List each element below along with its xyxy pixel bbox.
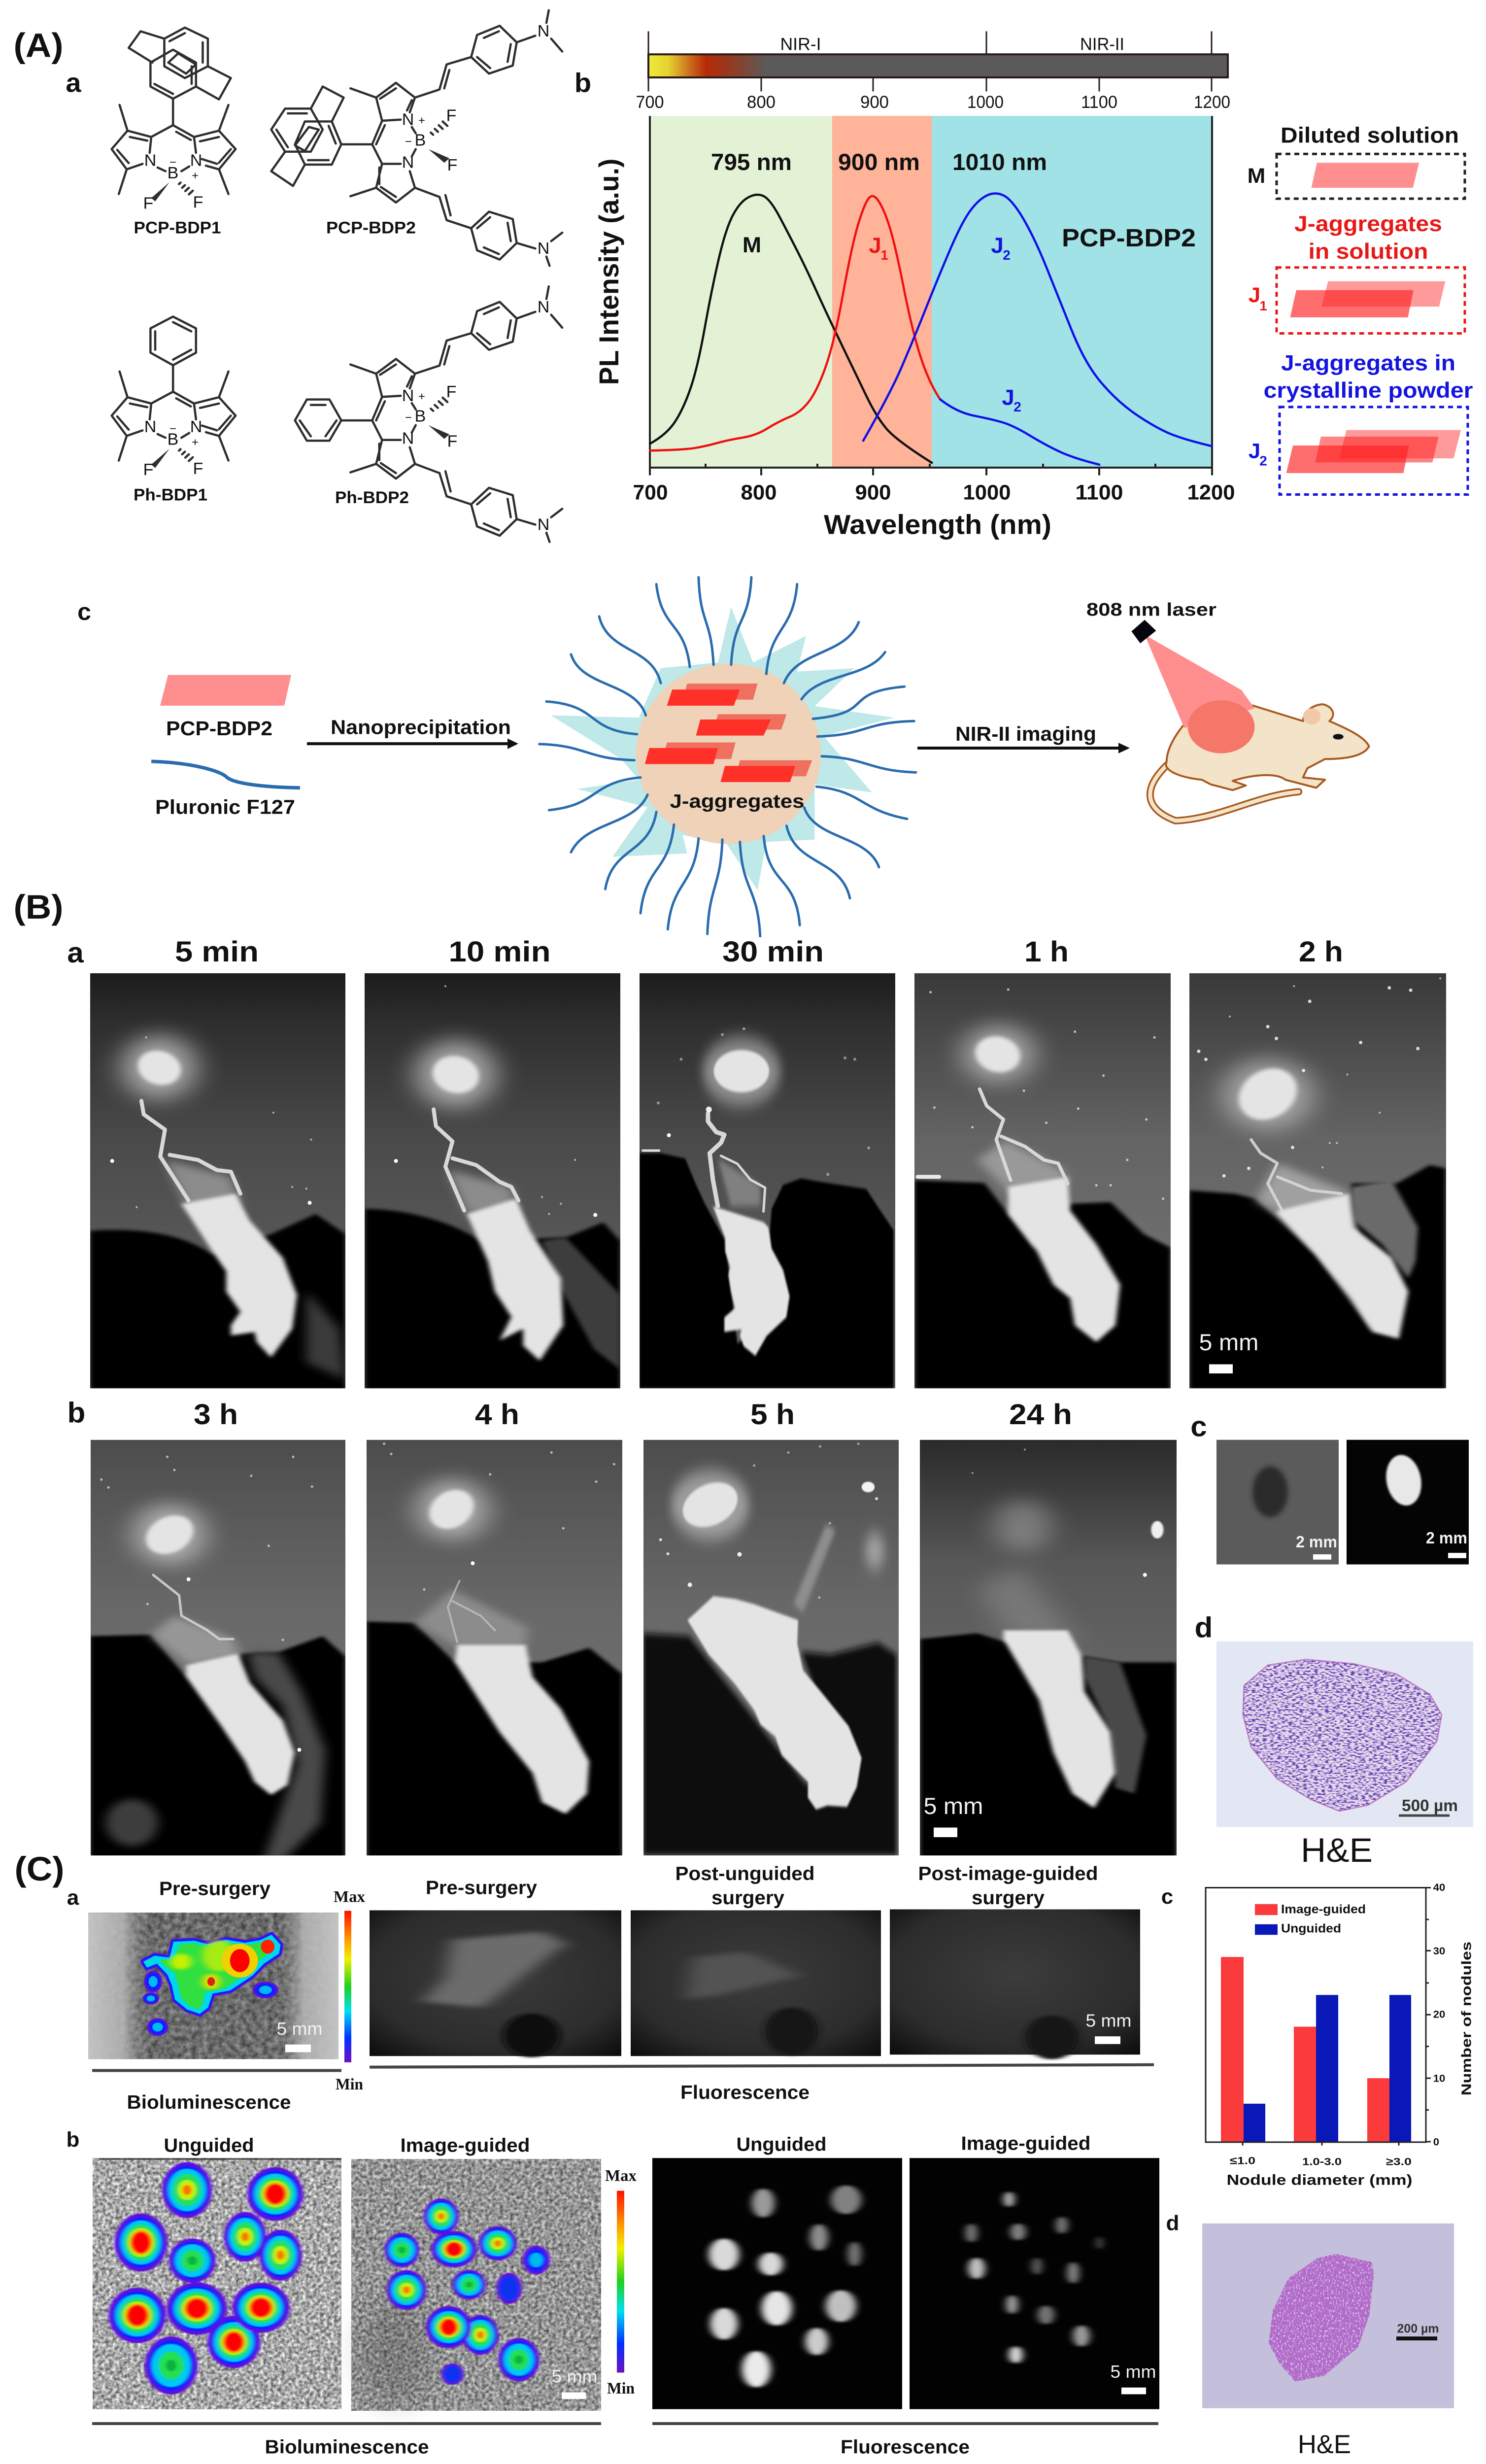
NIR wavelength bar: 900: [860, 92, 889, 112]
image: 5 h: [643, 1440, 899, 1855]
image: 2 h: 5 mm: [1199, 1330, 1258, 1356]
time labels row a: [175, 935, 1343, 968]
nodule photo: fluorescence: [1347, 1440, 1469, 1565]
bioluminescence image: image-guided nodules: [351, 2159, 601, 2411]
PL spectrum chart: 900: [855, 481, 891, 504]
nodule photo: bright field: 2 mm: [1296, 1533, 1337, 1551]
column headings C-a: surgery: [711, 1887, 784, 1909]
panel label: (B): (B): [13, 888, 63, 926]
column headings C-b: Image-guided: [961, 2133, 1091, 2155]
PL spectrum chart: 900 nm: [838, 150, 920, 175]
aggregate legend: 2: [1259, 453, 1267, 468]
bar chart: nodule counts: 20: [1433, 2008, 1445, 2020]
panel label: (C): (C): [14, 1850, 64, 1888]
PCP-BDP2 parallelogram: [160, 675, 291, 706]
PL spectrum chart: 795 nm: [711, 150, 792, 175]
PL spectrum chart: 800: [741, 481, 777, 504]
fluorescence image: image-guided nodules: [910, 2158, 1159, 2409]
PL spectrum chart: J: [869, 233, 881, 258]
fluorescence image: unguided nodules: [652, 2158, 902, 2409]
panel label: A-b: b: [574, 68, 591, 98]
PL spectrum chart: 1200: [1187, 481, 1235, 504]
molecule: PCP-BDP2: F: [447, 157, 457, 174]
bar chart: nodule counts: Image-guided: [1281, 1903, 1366, 1916]
image: 10 min: [365, 973, 620, 1389]
bar chart: nodule counts: 1.0-3.0: [1302, 2156, 1342, 2167]
panel label: C-c: c: [1161, 1885, 1173, 1909]
molecule: PCP-BDP2: [271, 10, 562, 266]
Pluronic F127 label: Pluronic F127: [155, 795, 295, 818]
molecule: PCP-BDP1: PCP-BDP1: [134, 219, 221, 237]
column headings C-b: Image-guided: [401, 2135, 530, 2156]
nodule photo: bright field: [1216, 1440, 1339, 1565]
NIR wavelength bar: 1100: [1081, 92, 1117, 112]
bar chart: nodule counts: ≥3.0: [1386, 2156, 1412, 2167]
time labels row a: 1 h: [1024, 935, 1069, 968]
panel label: C-a: a: [67, 1886, 79, 1910]
panel label: (A): (A): [13, 26, 63, 64]
PL spectrum chart: [633, 116, 1235, 540]
colorbar C-a: [334, 1888, 365, 2093]
H&E section image (C): 200 µm: [1397, 2322, 1439, 2336]
colorbar C-b: Max: [605, 2167, 637, 2185]
PL spectrum chart: 2: [1013, 400, 1021, 414]
molecule: Ph-BDP2: [295, 286, 562, 542]
fluorescence image: image-guided nodules: 5 mm: [1110, 2361, 1156, 2382]
molecule: Ph-BDP1: F: [143, 461, 153, 479]
PCP-BDP2 label: PCP-BDP2: [166, 717, 272, 740]
bioluminescence rule and label (b): Bioluminescence: [265, 2436, 429, 2458]
molecule: Ph-BDP2: F: [446, 383, 456, 401]
image: 4 h: [367, 1440, 622, 1860]
molecule: PCP-BDP2: N: [402, 111, 414, 129]
panel label: B-b: b: [68, 1396, 85, 1429]
bar chart: nodule counts: 40: [1433, 1881, 1445, 1893]
molecule: Ph-BDP1: −: [169, 423, 176, 436]
image: 2 h: [1189, 973, 1446, 1389]
fluorescence image: post-image-guided surgery: 5 mm: [1085, 2011, 1131, 2030]
PL spectrum chart: J: [991, 233, 1004, 258]
bar chart: nodule counts: 10: [1433, 2072, 1445, 2084]
micelle: J-aggregates: [670, 791, 804, 812]
panel label: B-a: a: [67, 936, 84, 969]
NIR wavelength bar: NIR-II: [1080, 34, 1124, 54]
time labels row a: 30 min: [722, 935, 824, 968]
molecule: Ph-BDP1: +: [192, 436, 199, 449]
molecule: Ph-BDP2: −: [405, 411, 412, 424]
bioluminescence image: pre-surgery: [88, 1913, 338, 2059]
micelle: [540, 577, 916, 936]
molecule: PCP-BDP2: PCP-BDP2: [326, 219, 416, 237]
time labels row b: 24 h: [1009, 1398, 1072, 1431]
PL spectrum chart: 1000: [963, 481, 1011, 504]
molecule: Ph-BDP1: N: [144, 418, 156, 436]
H&E section image: 500 µm: [1402, 1797, 1458, 1815]
aggregate legend: in solution: [1308, 239, 1428, 264]
molecule: Ph-BDP2: +: [418, 391, 425, 403]
fluorescence rule and label: [370, 2065, 1154, 2103]
molecule: PCP-BDP1: N: [190, 152, 202, 170]
column headings C-b: Unguided: [164, 2135, 254, 2156]
H&E section image (C): [1202, 2224, 1454, 2408]
colorbar C-b: [605, 2167, 637, 2397]
molecule: PCP-BDP2: N: [538, 240, 549, 258]
bioluminescence image: unguided nodules: [93, 2158, 341, 2409]
arrow: NIR-II imaging: [917, 743, 1130, 753]
PL spectrum chart: Wavelength (nm): [824, 509, 1051, 540]
molecule: Ph-BDP2: N: [402, 387, 414, 405]
column headings C-a: Post-image-guided: [918, 1863, 1098, 1884]
PL spectrum chart: J: [1002, 385, 1014, 410]
arrow: nanoprecipitation: [307, 738, 518, 749]
fluorescence image: pre-surgery: [370, 1910, 621, 2057]
molecule: PCP-BDP2: B: [415, 132, 426, 149]
molecule: Ph-BDP2: N: [402, 430, 414, 448]
fluorescence rule and label: Fluorescence: [680, 2082, 810, 2103]
bioluminescence rule and label: Bioluminescence: [127, 2091, 291, 2113]
aggregate legend: J-aggregates: [1294, 211, 1442, 236]
molecule: Ph-BDP1: [112, 316, 236, 504]
NIR wavelength bar: NIR-I: [780, 34, 821, 54]
bar chart: nodule counts: Unguided: [1281, 1922, 1341, 1935]
column headings C-b: Unguided: [736, 2134, 827, 2156]
molecule: PCP-BDP1: B: [168, 164, 178, 182]
H&E section image: [1216, 1642, 1473, 1827]
PL spectrum chart: 1100: [1075, 481, 1123, 504]
colorbar C-a: Min: [336, 2076, 363, 2093]
fluorescence image: post-unguided surgery: [631, 1910, 881, 2056]
molecule: PCP-BDP2: N: [538, 22, 549, 40]
y axis title: PL Intensity (a.u.): [594, 159, 624, 385]
nodule photo: fluorescence: 2 mm: [1426, 1530, 1467, 1547]
fluorescence image: post-image-guided surgery: [890, 1909, 1140, 2059]
mouse with laser: [1131, 620, 1369, 821]
molecule: PCP-BDP2: F: [446, 107, 456, 125]
NIR wavelength bar: [636, 31, 1230, 112]
molecule: PCP-BDP1: −: [169, 156, 176, 169]
panel label: A-c: c: [77, 599, 91, 625]
PL spectrum chart: 2: [1003, 247, 1011, 263]
NIR wavelength bar: 700: [636, 92, 664, 112]
time labels row a: 2 h: [1299, 935, 1343, 968]
Pluronic F127 polymer chain: [151, 761, 300, 788]
molecule: PCP-BDP2: +: [418, 114, 425, 127]
column headings C-b: [164, 2133, 1090, 2156]
aggregate legend: 1: [1259, 299, 1267, 313]
panel label: C-d: d: [1166, 2212, 1179, 2235]
molecule: PCP-BDP1: F: [143, 195, 153, 212]
colorbar C-b: Min: [607, 2379, 635, 2397]
H&E caption: H&E: [1301, 1831, 1373, 1869]
nanoprecipitation label: Nanoprecipitation: [331, 716, 511, 738]
panel label: B-d: d: [1195, 1611, 1213, 1644]
molecule: Ph-BDP2: N: [538, 299, 549, 316]
molecule: PCP-BDP1: N: [144, 152, 156, 170]
molecule: Ph-BDP1: B: [168, 431, 178, 449]
image: 24 h: 5 mm: [923, 1793, 983, 1819]
fluorescence rule and label (b): Fluorescence: [841, 2436, 970, 2458]
NIR wavelength bar: 1200: [1194, 92, 1230, 112]
PL spectrum chart: PCP-BDP2: [1062, 224, 1196, 252]
image: 30 min: [640, 973, 895, 1388]
molecule: PCP-BDP2: −: [405, 136, 412, 148]
column headings C-a: Post-unguided: [675, 1863, 814, 1884]
image: 3 h: [90, 1440, 345, 1860]
bar chart: nodule counts: 30: [1433, 1945, 1445, 1957]
image: 24 h: [920, 1440, 1177, 1860]
molecule: Ph-BDP2: N: [538, 516, 549, 534]
aggregate legend: J: [1249, 440, 1260, 463]
molecule: Ph-BDP1: F: [193, 460, 203, 478]
image: 1 h: [914, 973, 1171, 1389]
time labels row b: [194, 1398, 1072, 1431]
NIR wavelength bar: 1000: [967, 92, 1004, 112]
molecule: Ph-BDP2: Ph-BDP2: [335, 489, 409, 507]
column headings C-a: Pre-surgery: [426, 1877, 537, 1898]
molecule: Ph-BDP1: N: [190, 418, 202, 436]
bioluminescence image: pre-surgery: 5 mm: [277, 2019, 323, 2039]
NIR-II imaging label: NIR-II imaging: [955, 722, 1096, 745]
aggregate legend: M: [1248, 165, 1265, 188]
column headings C-a: surgery: [972, 1887, 1045, 1909]
panel label: A-a: a: [66, 68, 82, 98]
molecule: Ph-BDP2: F: [447, 433, 457, 450]
molecule: PCP-BDP1: [112, 28, 236, 237]
aggregate legend: Diluted solution: [1281, 123, 1459, 147]
time labels row b: 3 h: [194, 1398, 238, 1431]
colorbar C-a: Max: [334, 1888, 365, 1906]
bar chart: nodule counts: ≤1.0: [1230, 2155, 1255, 2166]
PL spectrum chart: 1: [880, 247, 888, 263]
bar chart: nodule counts: Nodule diameter (mm): [1227, 2172, 1412, 2188]
NIR wavelength bar: 800: [747, 92, 776, 112]
time labels row b: 5 h: [750, 1398, 795, 1431]
panel label: C-b: b: [67, 2128, 79, 2152]
aggregate legend: [1248, 123, 1473, 495]
bar chart: nodule counts: 0: [1433, 2136, 1439, 2148]
image: 5 min: [90, 973, 345, 1389]
aggregate legend: J: [1249, 284, 1260, 307]
aggregate legend: J-aggregates in: [1281, 350, 1455, 375]
time labels row a: 5 min: [175, 935, 259, 968]
PL spectrum chart: M: [743, 233, 761, 257]
molecule: PCP-BDP1: F: [193, 194, 203, 211]
panel label: B-c: c: [1190, 1410, 1207, 1442]
molecule: Ph-BDP1: Ph-BDP1: [134, 486, 207, 504]
808 nm laser label: 808 nm laser: [1086, 599, 1216, 620]
time labels row a: 10 min: [448, 935, 550, 968]
bioluminescence image: image-guided nodules: 5 mm: [552, 2366, 597, 2387]
time labels row b: 4 h: [475, 1398, 519, 1431]
PL spectrum chart: 700: [633, 481, 668, 504]
PL spectrum chart: 1010 nm: [952, 150, 1047, 175]
molecule: PCP-BDP2: N: [402, 154, 414, 171]
molecule: Ph-BDP2: B: [415, 408, 426, 426]
aggregate legend: crystalline powder: [1263, 377, 1473, 403]
H&E caption (C): H&E: [1298, 2430, 1351, 2459]
bar chart: nodule counts: Number of nodules: [1458, 1942, 1474, 2095]
molecule: PCP-BDP1: +: [192, 170, 199, 182]
bar chart: nodule counts: [1206, 1881, 1474, 2188]
column headings C-a: [159, 1863, 1098, 1909]
column headings C-a: Pre-surgery: [159, 1878, 270, 1899]
